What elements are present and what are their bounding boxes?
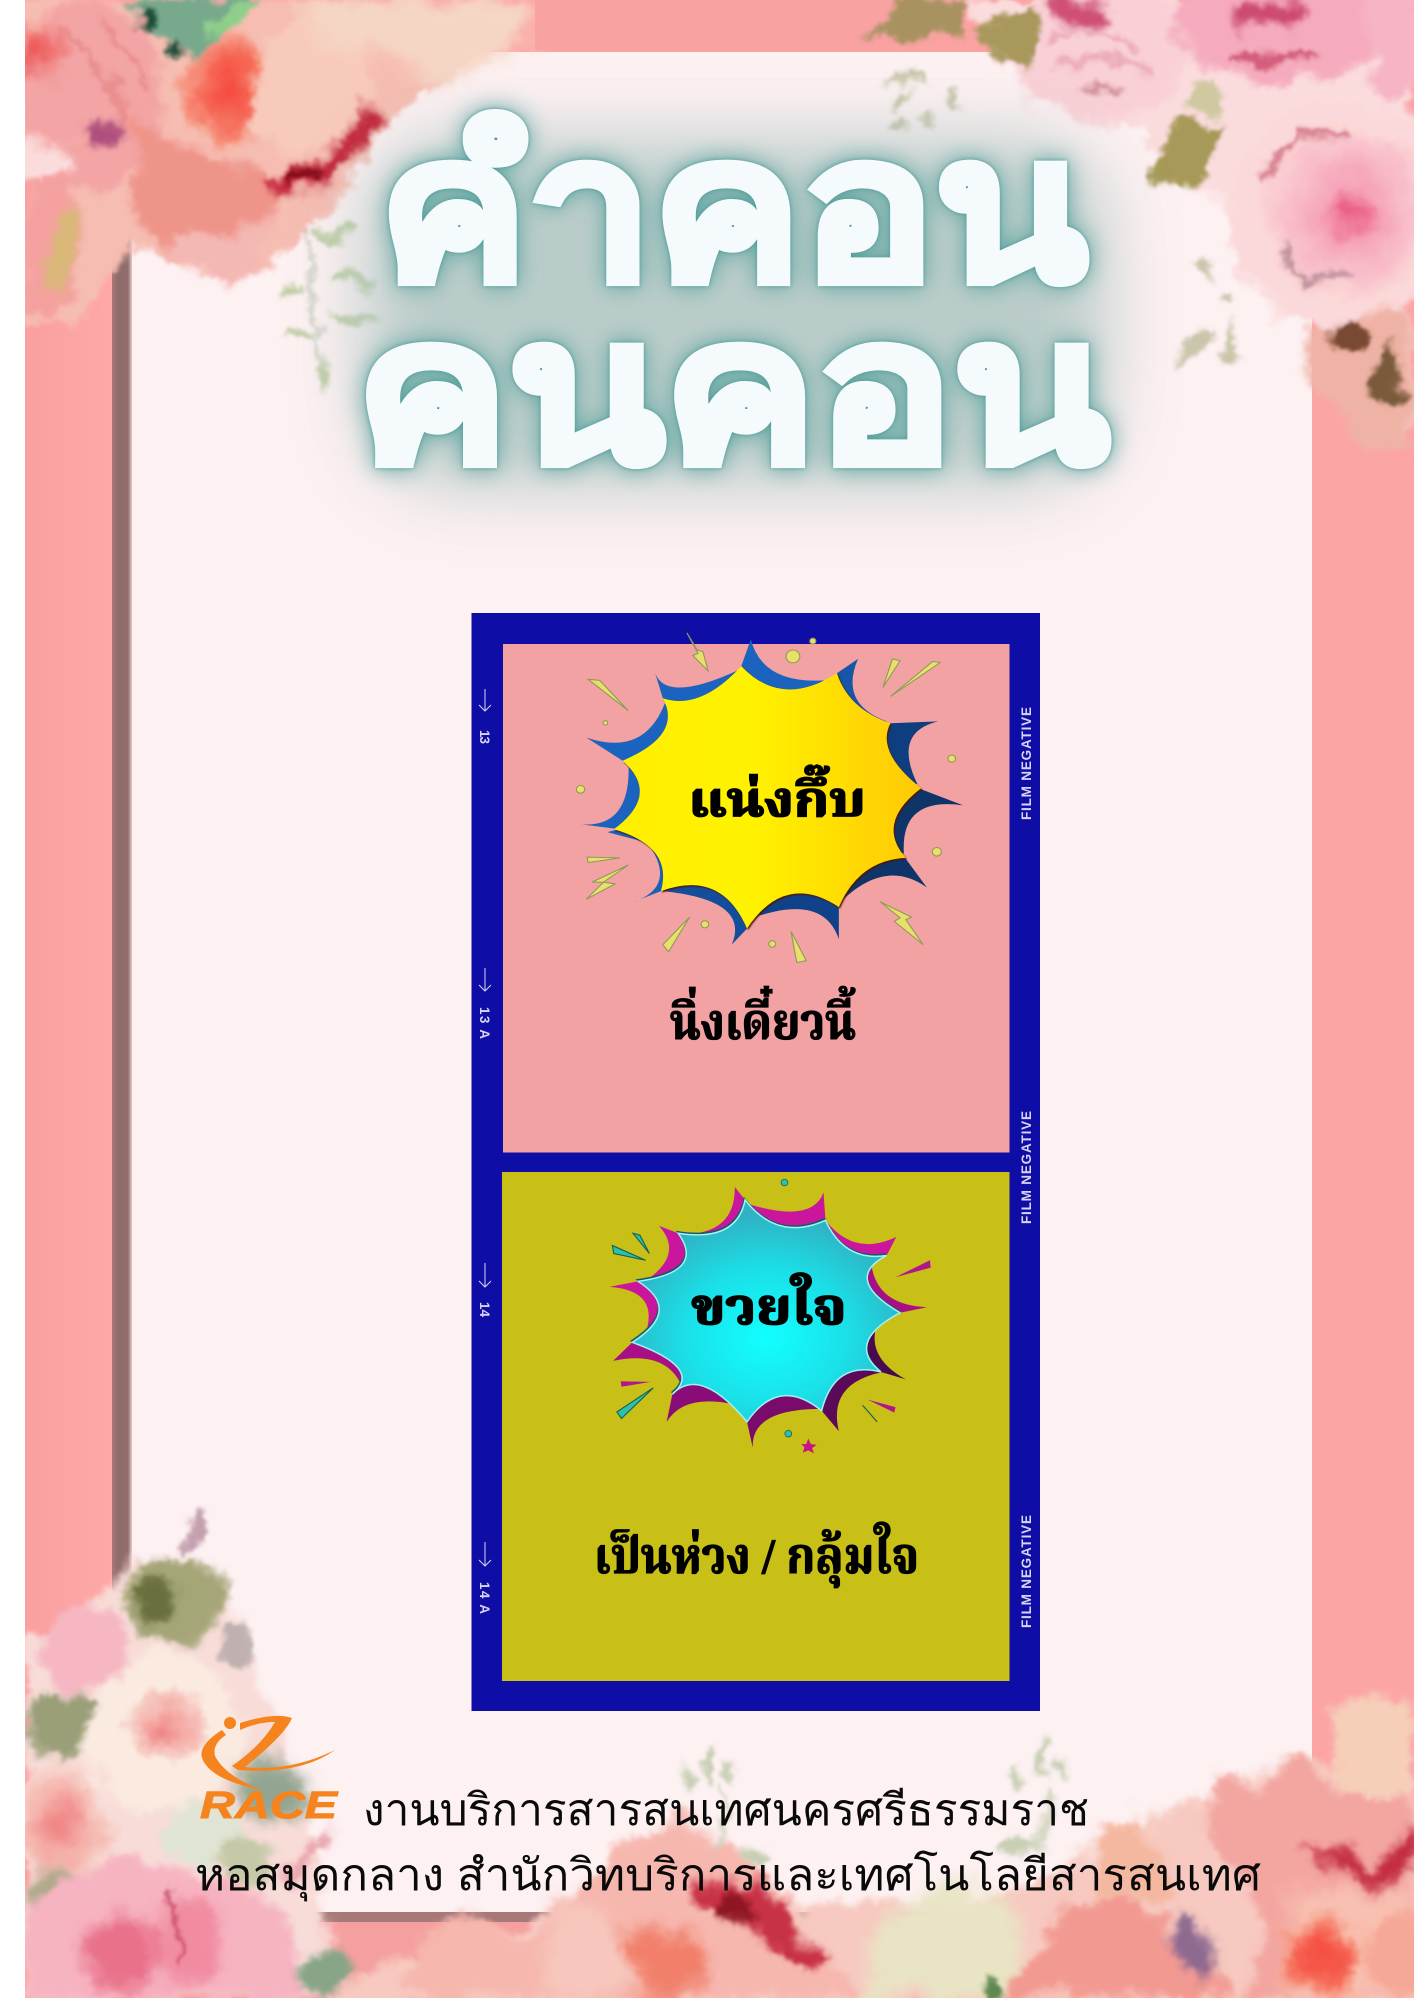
- magenta crescents: [609, 1187, 927, 1448]
- footer line 1: งานบริการสารสนเทศนครศรีธรรมราช: [363, 1786, 1089, 1835]
- logo: RACE: [200, 1716, 339, 1827]
- title glow backdrop: [365, 140, 1105, 485]
- panel: olive frame 14: [502, 1172, 1010, 1681]
- film label: 13 A: [477, 968, 492, 1039]
- film label: FILM NEGATIVE middle: FILM NEGATIVE: [1019, 1111, 1034, 1224]
- film label: 13: [477, 689, 492, 744]
- sparks: [576, 633, 956, 962]
- flowers: top-right bouquet: [860, 0, 1414, 450]
- film label: FILM NEGATIVE bottom: FILM NEGATIVE: [1019, 1515, 1034, 1628]
- film label: 14 A: [477, 1542, 492, 1614]
- burst label: แน่งกึ๊บ: [688, 765, 866, 827]
- right pink strip: [1312, 300, 1414, 1800]
- sparks: [612, 1179, 931, 1453]
- film label: 13 A: 13 A: [477, 1007, 492, 1039]
- title: [356, 99, 1109, 504]
- caption: pink panel: นิ่งเดี๋ยวนี้: [670, 986, 856, 1050]
- burst: yellow and blue: [576, 633, 963, 962]
- flowers: top-left bouquet: [17, 0, 530, 391]
- film label: 14: [477, 1263, 492, 1317]
- title line 1: คำคอน: [379, 99, 1087, 322]
- yellow star face: [614, 666, 921, 929]
- burst: cyan and magenta: [609, 1179, 931, 1453]
- film negative frame: [472, 613, 1040, 1711]
- panel: pink frame 13: [503, 644, 1010, 1152]
- film label: 13: 13: [477, 730, 492, 744]
- caption: olive panel: เป็นห่วง / กลุ้มใจ: [594, 1522, 919, 1587]
- flowers: bottom and bottom-right bouquet: [330, 1700, 1414, 2000]
- blue crescents: [581, 639, 963, 945]
- film label: FILM NEGATIVE top: FILM NEGATIVE: [1019, 707, 1034, 820]
- footer line 2: หอสมุดกลาง สำนักวิทบริการและเทศโนโลยีสารสนเทศ: [195, 1850, 1261, 1902]
- burst label: ขวยใจ: [692, 1272, 847, 1335]
- logo swoosh: [201, 1716, 335, 1790]
- cyan star face: [632, 1200, 900, 1422]
- logo wordmark: RACE: [200, 1785, 339, 1827]
- flowers: bottom-left bouquet: [8, 1508, 355, 1998]
- title line 2: คนคอน: [356, 281, 1109, 504]
- film label: 14: 14: [477, 1302, 492, 1317]
- top pink band: [535, 0, 895, 50]
- film label: 14 A: 14 A: [477, 1582, 492, 1614]
